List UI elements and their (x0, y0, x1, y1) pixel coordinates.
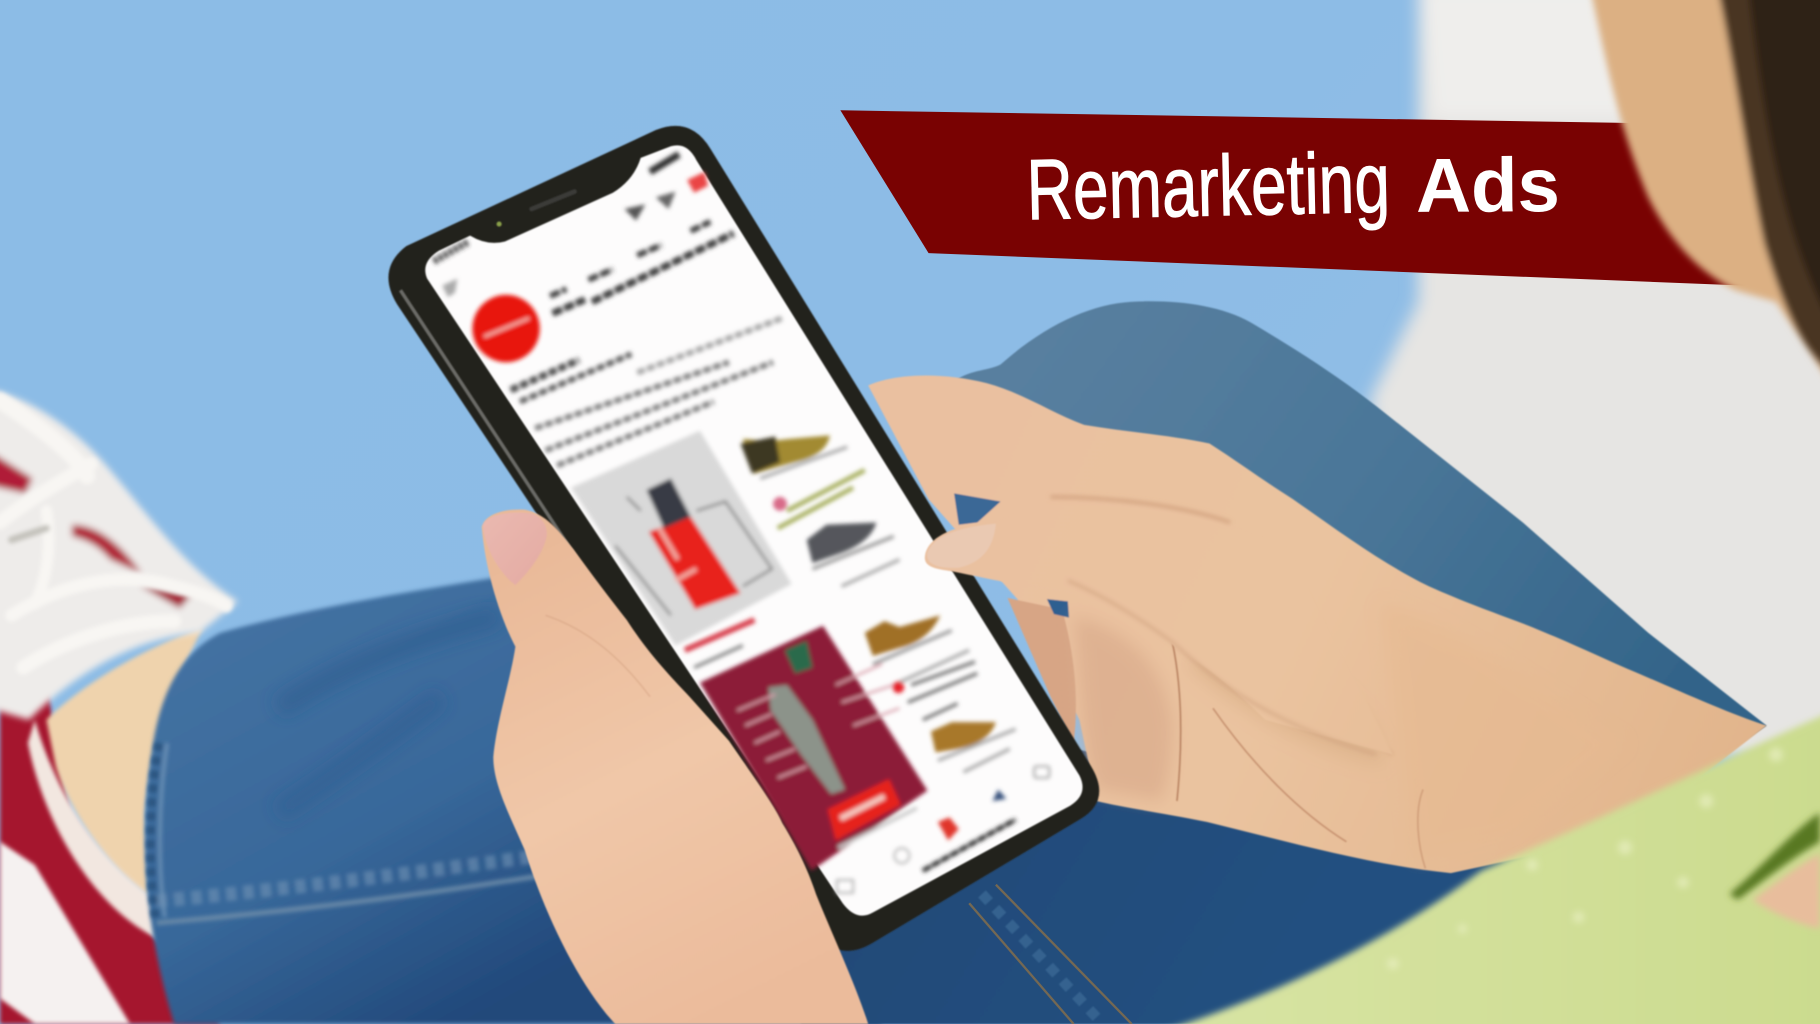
wrist shading (1381, 604, 1625, 859)
finger shadow behind phone (1008, 598, 1076, 743)
earpiece and camera (497, 192, 575, 227)
banner: remarketing ads (840, 110, 1746, 286)
jeans pocket band (982, 894, 1103, 1024)
phone screen contents (434, 154, 1049, 893)
jeans left leg (145, 557, 882, 1024)
face and hair in foreground (1588, 0, 1820, 389)
finger underside crease (1050, 497, 1230, 522)
jeans centre thigh (801, 743, 1509, 1024)
phone screen (425, 145, 1083, 916)
right thumb (925, 497, 1393, 755)
gap of jeans between finger and thumb (954, 493, 1001, 525)
shoe red sole side (0, 650, 221, 1024)
thumb base crease (1068, 580, 1377, 755)
shoe product 1 (741, 435, 847, 478)
thumbnail (483, 512, 547, 585)
banner title text: Remarketing (1026, 135, 1391, 238)
phone side edge highlight (400, 290, 812, 917)
product 1 caption (773, 470, 865, 528)
brand logo (472, 295, 540, 362)
shoe laces and tongue (0, 389, 238, 720)
shoe white stripe (0, 842, 130, 1024)
cheek skin (1588, 0, 1820, 389)
thumb muscle shading (1184, 657, 1384, 766)
product photo with red bottle (571, 431, 792, 646)
bottom navigation icons (837, 766, 1049, 893)
status bar icons (434, 154, 708, 297)
banner title text: Ads (1416, 143, 1560, 229)
white cushion background (1370, 0, 1820, 789)
ankle skin (46, 627, 203, 896)
shoe product 3 (865, 615, 969, 685)
hair (1716, 0, 1820, 377)
green sleeve (1157, 711, 1820, 1024)
shoe product 2 (807, 522, 900, 586)
product 3 caption (893, 662, 977, 720)
palm shading (1074, 615, 1173, 801)
phone body (388, 126, 1099, 951)
left hand (482, 510, 868, 1024)
gap of jeans beside lower finger (1047, 599, 1069, 618)
red caption (685, 620, 754, 668)
shoe product 4 (931, 722, 1016, 772)
shoe white collar trim (28, 720, 162, 940)
phone (388, 126, 1099, 951)
left shoe and ankle (0, 389, 238, 1024)
top header text (550, 222, 734, 313)
jeans hem seam (151, 615, 557, 923)
jeans pocket stitching (969, 885, 1132, 1024)
banner ribbon (840, 110, 1746, 286)
body copy text (511, 318, 782, 466)
jeans right knee (952, 301, 1767, 894)
sleeve fold and pattern (1387, 748, 1820, 969)
thumbnail (927, 524, 996, 568)
right hand fingers and palm behind phone (868, 375, 1767, 873)
maroon ad panel (700, 626, 927, 871)
